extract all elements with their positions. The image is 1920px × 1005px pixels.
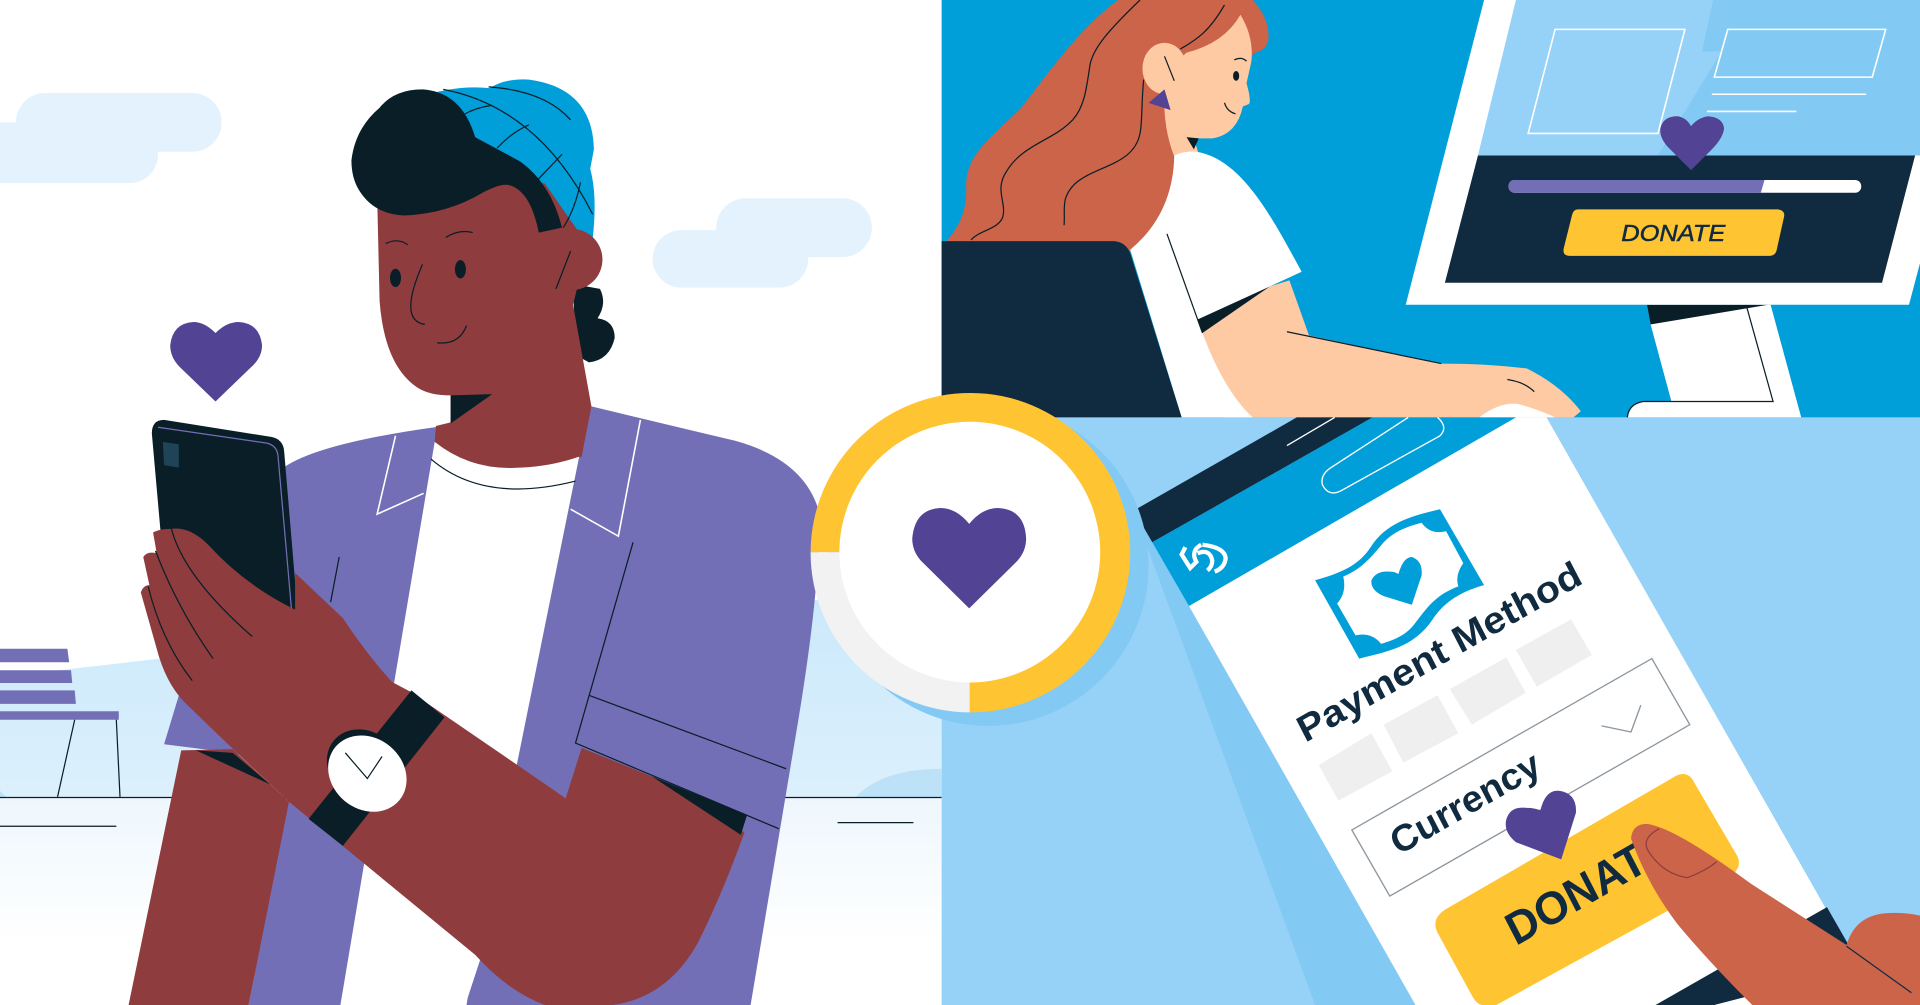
person with phone [129,79,819,1005]
icon: heart on form [1506,791,1576,859]
t-shirt [340,442,579,1005]
icon: logo [1182,545,1226,572]
face and neck [1163,15,1252,157]
left arm [129,749,289,1005]
panel: desktop scene background [942,0,1920,417]
cloud: upper left [0,93,222,183]
lapel lines [377,420,640,536]
phone [152,420,298,611]
donate button: DONATE [1497,818,1680,955]
hair bun [573,284,615,362]
header bars [1134,417,1373,542]
icon: center heart [912,508,1026,608]
donate button [1563,209,1784,256]
payment options [1319,619,1592,801]
chair [942,241,1182,417]
neck and face [377,159,591,468]
jacket lines [331,542,786,829]
ring progress [811,393,1130,712]
panel: park scene background [0,0,942,1005]
icon: banknote with heart [1315,509,1484,659]
phone shadow [1134,510,1416,1005]
neck shadow [1187,137,1199,149]
sleeve shadow right [651,776,747,835]
hand with pointing finger [1631,824,1920,1005]
hand on mouse [1479,404,1555,417]
currency field [1352,659,1690,896]
arm [1182,280,1581,417]
sleeve shadow left [196,750,271,785]
person at computer [942,0,1581,417]
neck shadow [451,394,492,424]
jacket [285,406,819,1005]
hat [416,79,595,263]
bench [0,649,120,797]
cloud: right of head [653,198,872,288]
shirt [1130,152,1302,417]
progress bar [1509,180,1861,193]
icon: heart above phone [170,322,262,402]
hair [943,0,1269,252]
phone body [1189,417,1920,1005]
watch [309,690,444,846]
panel: phone scene background [942,417,1920,1005]
earring [1149,89,1171,110]
hair [351,89,562,233]
donation progress ring [811,393,1149,726]
ring shadow [828,405,1149,726]
phone [1134,417,1920,1005]
icon: heart on screen [1660,116,1724,170]
payment method heading: Payment Method [1290,553,1588,750]
screen placeholders [1528,29,1886,133]
ring center [839,422,1100,682]
donate button [1435,774,1739,1005]
ring track [811,552,970,712]
jacket lower strip [249,796,367,1005]
hat lines [443,87,593,228]
ear [1142,43,1187,94]
left jacket sleeve [164,679,306,771]
monitor [1406,0,1920,417]
linework [971,0,1534,392]
ear [541,229,602,290]
stand [1627,305,1801,417]
phone bottom bar [1656,907,1861,1005]
forearm and hand [141,529,744,1005]
donate button: DONATE [1621,220,1726,246]
screen [1478,0,1920,155]
face details [386,231,473,343]
monitor frame [1406,0,1920,305]
currency field: Currency [1383,743,1547,863]
